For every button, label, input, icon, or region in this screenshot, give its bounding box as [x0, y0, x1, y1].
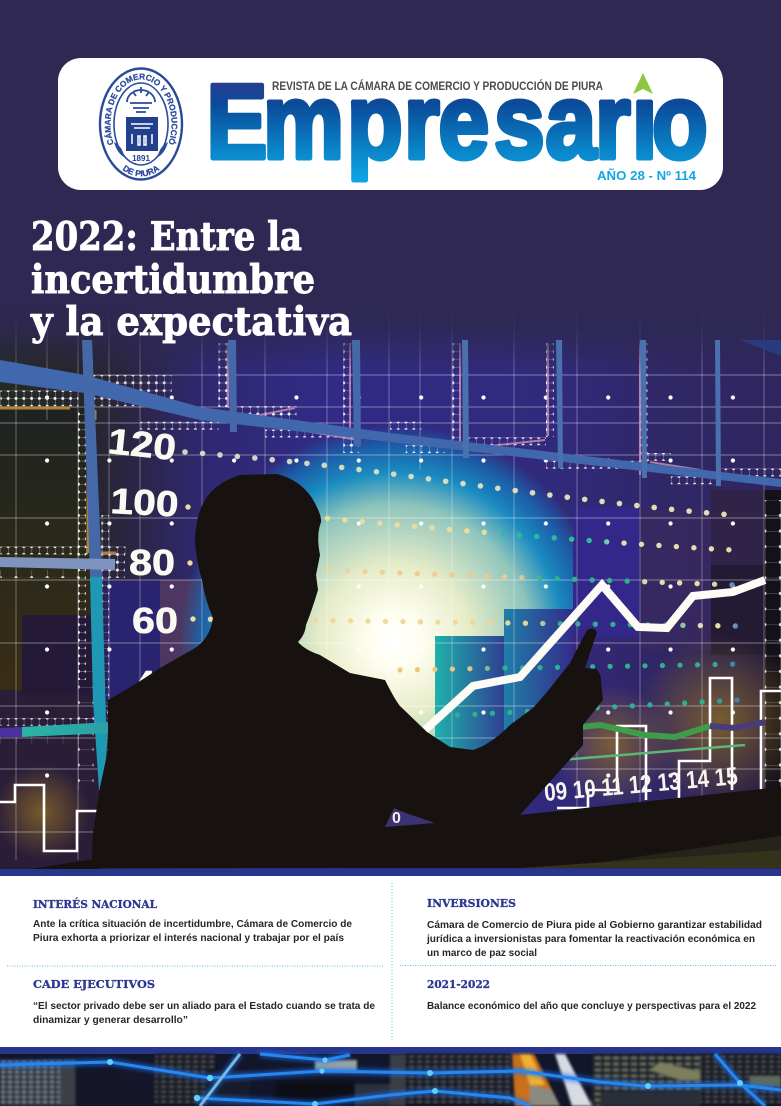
rows of chart dots [185, 452, 738, 716]
story: interés nacional: Ante la crítica situación de incertidumbre, Cámara de Comercio de [33, 918, 352, 930]
masthead arrow accent [626, 72, 658, 97]
story: 2021-2022 [427, 978, 756, 1012]
green trend lines [560, 722, 765, 760]
story: interés nacional: Piura exhorta a priorizar el interés nacional y trabajar por el país [33, 932, 344, 944]
main headline: incertidumbre [31, 257, 315, 303]
story: cade ejecutivos: “El sector privado debe ser un aliado para el Estado cuando se trata de [33, 1000, 375, 1012]
main headline: 2022: Entre la [31, 214, 302, 260]
lit screen patch under arm: 0 [392, 810, 401, 827]
axis number labels: 120 [106, 420, 178, 468]
header panel [58, 58, 723, 190]
masthead wordmark: Empresario [206, 63, 708, 181]
fade of grid into title area [0, 300, 781, 375]
main headline [30, 214, 352, 345]
story: inversiones [426, 897, 762, 959]
page background [0, 0, 781, 870]
translucent blue beams [0, 340, 781, 790]
blue divider bar [0, 869, 781, 876]
orange and pink highlights along grid [0, 345, 780, 553]
logo seal: Cámara de Comercio [98, 67, 184, 181]
logo seal: Cámara de Comercio: 1891 [132, 154, 150, 163]
story: 2021-2022: 2021-2022 [427, 978, 490, 991]
axis number labels: 100 [110, 480, 180, 525]
axis number labels: 80 [129, 542, 175, 583]
axis number labels: 4 [135, 663, 155, 704]
white line chart [425, 580, 765, 730]
city network photo strip [0, 1054, 781, 1106]
issue number: AÑO 28 - Nº 114 [597, 168, 696, 183]
story: cade ejecutivos: dinamizar y generar desarrollo” [33, 1014, 188, 1026]
story: interés nacional [33, 897, 352, 944]
story: inversiones: un marco de paz social [427, 947, 537, 959]
story: inversiones: Cámara de Comercio de Piura pide al Gobierno garantizar estabilidad [427, 919, 762, 931]
story: cade ejecutivos [33, 978, 375, 1026]
lit screen patch under arm [385, 808, 435, 827]
story: interés nacional: INTERÉS NACIONAL [33, 897, 157, 911]
story: inversiones: INVERSIONES [427, 897, 516, 910]
screen grid lines [0, 300, 781, 860]
man silhouette and desk [30, 474, 781, 869]
year labels: 09 10 11 12 13 14 15 [543, 762, 739, 807]
lower blue bar [0, 1047, 781, 1054]
tagline: REVISTA DE LA CÁMARA DE COMERCIO Y PRODUCCIÓN DE PIURA [272, 80, 603, 93]
contents panel [0, 876, 781, 1047]
logo seal: Cámara de Comercio: DE PIURA [122, 165, 160, 176]
story: 2021-2022: Balance económico del año que concluye y perspectivas para el 2022 [427, 1000, 756, 1012]
step chart outlines [0, 678, 781, 851]
axis number labels: 60 [132, 600, 178, 641]
main headline: y la expectativa [30, 299, 352, 345]
hero illustration: data screen [0, 300, 781, 870]
story: cade ejecutivos: CADE EJECUTIVOS [33, 978, 155, 991]
axis number labels [106, 420, 180, 704]
story: inversiones: jurídica a inversionistas para fomentar la reactivación económica en [426, 933, 755, 945]
